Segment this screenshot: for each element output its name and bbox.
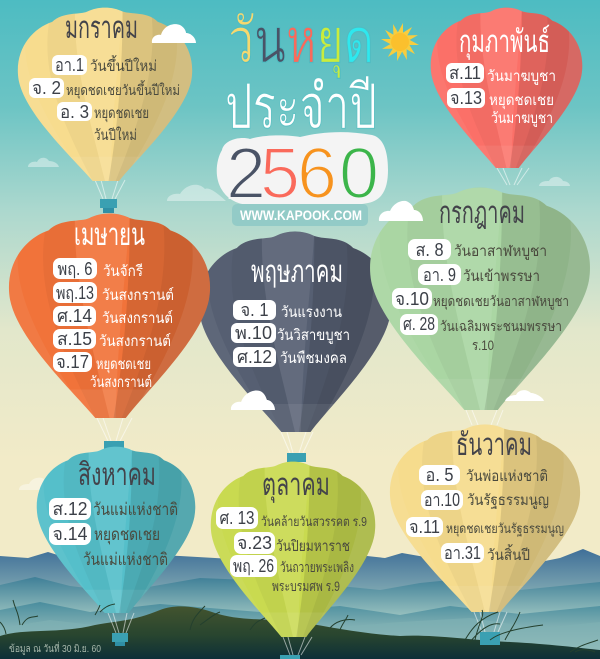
holiday text: หยุดชดเชย: [96, 356, 151, 374]
date pill: ส. 8: [416, 240, 444, 260]
date pill: ส.15: [57, 329, 92, 349]
date pill: จ.13: [450, 88, 482, 108]
month title: ตุลาคม: [262, 467, 330, 504]
balloon: April: [0, 213, 231, 450]
holiday text: วันแรงงาน: [281, 304, 342, 321]
holiday text: วันคล้ายวันสวรรคต ร.9: [261, 514, 367, 529]
holiday text: วันปีใหม่: [94, 126, 137, 144]
holiday text: วันถวายพระเพลิง: [280, 559, 354, 575]
holiday text: วันรัฐธรรมนูญ: [467, 492, 549, 509]
date pill: จ.14: [52, 524, 88, 544]
holiday text: วันเฉลิมพระชนมพรรษา: [440, 318, 562, 334]
balloon: February: [422, 8, 598, 185]
holiday text: หยุดชดเชย: [94, 525, 160, 545]
decorative faint clouds: [19, 158, 570, 490]
year cloud with 2560: 0: [339, 134, 379, 214]
mountains: [0, 549, 600, 659]
white clouds: [152, 24, 544, 410]
balloon: May: [188, 232, 411, 462]
date pill: อา.10: [424, 490, 460, 510]
balloon: August: [28, 447, 212, 646]
year cloud with 2560: 2: [226, 134, 266, 214]
holiday text: วันปิยมหาราช: [276, 538, 350, 555]
year cloud with 2560: [217, 132, 388, 214]
date pill: อ. 5: [426, 465, 454, 485]
holiday text: วันวิสาขบูชา: [277, 327, 350, 344]
title: ประจำปี: ประจำปี: [225, 73, 377, 142]
website label: [232, 204, 368, 226]
ropes and envelope: [358, 187, 600, 425]
holiday text: วันแม่แห่งชาติ: [83, 550, 168, 569]
date pill: ศ. 28: [403, 314, 435, 334]
balloon: January: [8, 8, 211, 213]
holiday text: หยุดชดเชยวันรัฐธรรมนูญ: [446, 521, 564, 537]
footer source note: ข้อมูล ณ วันที่ 30 มิ.ย. 60: [9, 641, 101, 655]
date pill: ส.12: [52, 499, 88, 519]
ropes and envelope: [422, 8, 598, 185]
holiday text: วันพืชมงคล: [280, 350, 347, 367]
date pill: ศ. 13: [220, 508, 254, 528]
ropes, basket and envelope: [379, 425, 600, 645]
date pill: ศ.14: [57, 306, 92, 326]
date pill: พฤ.13: [56, 283, 94, 303]
month title: เมษายน: [74, 217, 145, 252]
holiday text: วันพ่อแห่งชาติ: [466, 468, 548, 485]
holiday text: วันสงกรานต์: [99, 333, 171, 350]
month title: ธันวาคม: [456, 427, 532, 462]
month title: กุมภาพันธ์: [459, 24, 550, 61]
balloon: July: [358, 187, 600, 425]
ropes, basket and envelope: [0, 213, 231, 450]
holiday text: ร.10: [472, 337, 494, 353]
year cloud with 2560: 5: [260, 134, 300, 214]
year cloud with 2560: 6: [297, 134, 337, 214]
website label: WWW.KAPOOK.COM: [240, 208, 362, 223]
holiday text: วันแม่แห่งชาติ: [93, 500, 178, 519]
holiday text: วันขึ้นปีใหม่: [90, 55, 157, 75]
holiday text: วันสิ้นปี: [487, 544, 530, 564]
icon: sun: [381, 23, 419, 61]
month title: พฤษภาคม: [251, 254, 343, 289]
date pill: พ.10: [235, 323, 272, 343]
balloon: October: [202, 462, 393, 659]
date pill: จ. 2: [32, 78, 61, 98]
date pill: ศ.12: [237, 347, 272, 367]
month title: สิงหาคม: [78, 457, 156, 492]
date pill: อา.1: [55, 55, 84, 75]
date pill: อา.31: [444, 543, 481, 563]
date pill: จ.10: [395, 289, 429, 309]
holiday text: หยุดชดเชย: [94, 105, 149, 123]
ropes, basket and envelope: [202, 462, 393, 659]
month title: มกราคม: [65, 10, 138, 45]
ropes, basket and envelope: [28, 447, 212, 646]
holiday text: วันมาฆบูชา: [487, 68, 556, 85]
holiday text: วันอาสาฬหบูชา: [454, 243, 547, 260]
holiday text: หยุดชดเชยวันอาสาฬหบูชา: [433, 293, 569, 310]
holiday text: วันมาฆบูชา: [491, 110, 553, 127]
date pill: จ. 1: [240, 300, 268, 320]
title: วันหยุด: วันหยุด: [228, 7, 374, 78]
holiday text: วันสงกรานต์: [90, 374, 152, 391]
holiday text: หยุดชดเชยวันขึ้นปีใหม่: [66, 80, 180, 99]
balloon: December: [379, 425, 600, 645]
date pill: [408, 239, 451, 260]
foreground grass: [0, 600, 598, 652]
holiday text: วันสงกรานต์: [102, 287, 174, 304]
holiday text: วันจักรี: [103, 263, 143, 280]
holiday text: วันสงกรานต์: [102, 310, 173, 327]
date pill: ส.11: [449, 63, 481, 83]
date pill: จ.11: [409, 517, 440, 537]
date pill: อา. 9: [423, 265, 456, 285]
date pill: อ. 3: [60, 102, 89, 122]
month title: กรกฎาคม: [439, 195, 525, 230]
holiday text: พระบรมศพ ร.9: [272, 578, 340, 594]
date pill: พฤ. 6: [58, 259, 92, 279]
date pill: พฤ. 26: [233, 556, 274, 576]
date pill: จ.23: [237, 533, 272, 553]
date pill: จ.17: [56, 352, 89, 372]
holiday text: วันเข้าพรรษา: [463, 268, 540, 285]
holiday text: หยุดชดเชย: [489, 92, 554, 110]
ropes, basket and envelope: [8, 8, 211, 213]
ropes, basket and envelope: [188, 232, 411, 462]
